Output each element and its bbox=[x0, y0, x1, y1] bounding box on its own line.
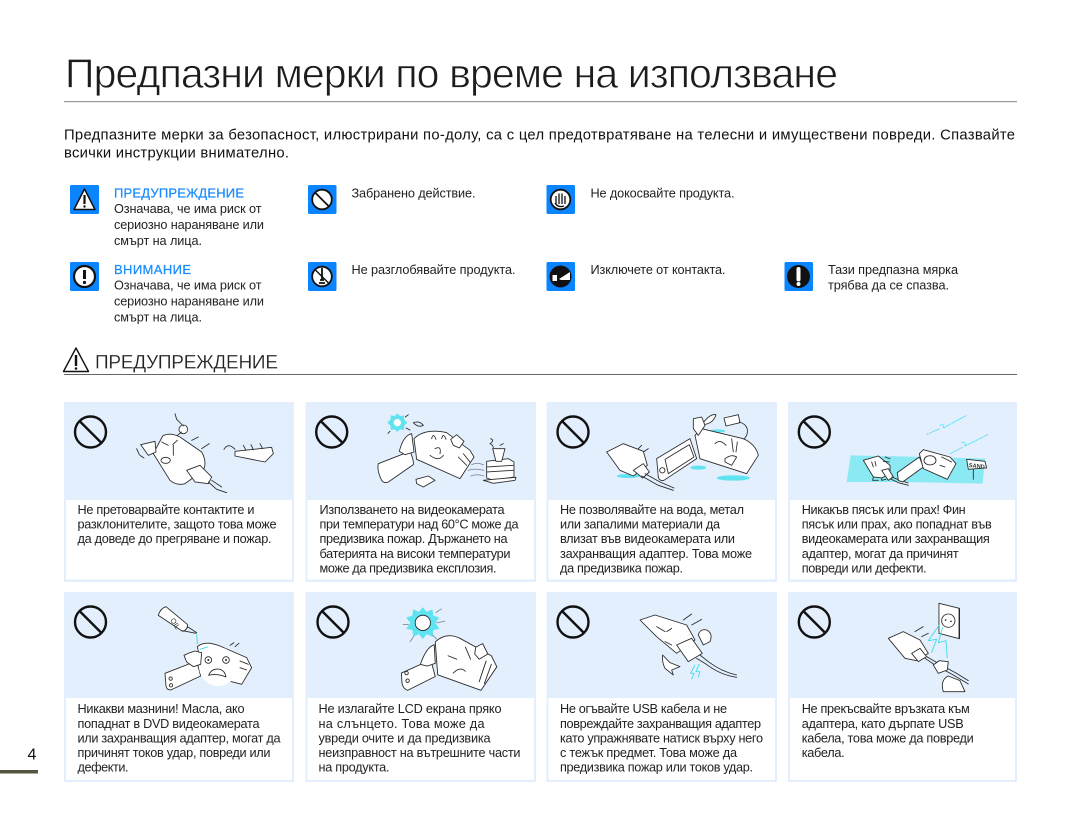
panel: do not bend cable: повреждайте захранващия адаптер bbox=[560, 717, 761, 731]
legend: warning: сериозно нараняване или bbox=[114, 218, 264, 232]
panel: high temperature: батерията на високи температури bbox=[320, 547, 510, 561]
legend: warning: смърт на лица. bbox=[114, 234, 202, 248]
panel: contacts overload: да доведе до прегряване и пожар. bbox=[78, 532, 272, 546]
icon: prohibited bbox=[558, 416, 588, 448]
panel: do not pull cable: Не прекъсвайте връзката към bbox=[802, 702, 970, 716]
intro text: всички инструкции внимателно. bbox=[64, 146, 289, 162]
panel: contacts overload: Не претоварвайте контактите и bbox=[78, 503, 254, 517]
icon: section warning triangle bbox=[64, 348, 88, 372]
panel: no oil: Никакви мазнини! Масла, ако bbox=[78, 702, 244, 716]
icon: prohibited bbox=[316, 416, 347, 448]
icon: unplug bbox=[546, 262, 575, 291]
panel: high temperature bbox=[306, 402, 536, 582]
icon: prohibited bbox=[799, 416, 830, 448]
legend: do not disassemble bbox=[308, 262, 516, 291]
illustration: camera on sand: SAND bbox=[968, 463, 985, 471]
legend: prohibited action: Забранено действие. bbox=[352, 186, 476, 200]
legend: caution: сериозно нараняване или bbox=[114, 294, 264, 308]
legend: caution: Означава, че има риск от bbox=[114, 278, 262, 292]
panel: do not bend cable bbox=[546, 592, 777, 782]
page number: 4 bbox=[28, 746, 36, 764]
legend: unplug bbox=[546, 262, 726, 291]
illustration: pulling cable from socket bbox=[888, 603, 968, 692]
legend: mandatory precaution: Тази предпазна мярка bbox=[828, 263, 959, 277]
page number bbox=[0, 746, 38, 774]
legend: warning bbox=[70, 185, 264, 248]
legend: caution bbox=[70, 262, 264, 324]
panel: water and metal: влизат във видеокамерата или bbox=[560, 532, 735, 546]
panel: no oil bbox=[64, 592, 294, 782]
icon: prohibited bbox=[318, 606, 348, 638]
panel: do not pull cable: адаптера, като дърпате USB bbox=[802, 717, 964, 731]
panel: do not pull cable: кабела. bbox=[802, 746, 845, 760]
illustration: overloaded adapter and power strip bbox=[137, 414, 273, 493]
illustration: sun on camera screen bbox=[401, 607, 497, 690]
icon: prohibited bbox=[75, 606, 106, 638]
illustration: wet adapter and camera bbox=[607, 415, 758, 490]
icon: warning triangle bbox=[70, 185, 99, 214]
legend: warning: Означава, че има риск от bbox=[114, 202, 262, 216]
panel: do not bend cable: Не огъвайте USB кабела и не bbox=[560, 702, 727, 716]
panel: do not pull cable: кабела, това може да повреди bbox=[802, 732, 974, 746]
section heading: warning: ПРЕДУПРЕЖДЕНИЕ bbox=[95, 352, 278, 373]
legend: do not touch bbox=[546, 185, 734, 214]
panel: no oil: причинят токов удар, повреди или bbox=[78, 746, 270, 760]
legend: mandatory precaution bbox=[784, 262, 959, 292]
icon: prohibited bbox=[75, 416, 106, 448]
panel: do not bend cable: като упражнявате натиск върху него bbox=[560, 732, 763, 746]
panel: sand and dust: пясък или прах, ако попаднат във bbox=[802, 518, 992, 532]
illustration: bent cable adapter bbox=[640, 614, 737, 679]
icon: prohibited bbox=[799, 606, 830, 638]
panel: no oil: попаднат в DVD видеокамерата bbox=[78, 717, 260, 731]
panel: contacts overload: разклонителите, защото това може bbox=[78, 518, 276, 532]
title: Предпазни мерки по време на използване bbox=[65, 50, 838, 96]
panel: high temperature: може да предизвика експлозия. bbox=[320, 562, 496, 576]
section heading: warning bbox=[64, 348, 1017, 375]
panel: sand and dust: повреди или дефекти. bbox=[802, 562, 927, 576]
panel: sand and dust bbox=[788, 402, 1017, 582]
intro text bbox=[64, 128, 1015, 162]
illustration: oil bottle and scared camera: OIL bbox=[168, 616, 182, 631]
panel: no direct sunlight: на слънцето. Това може да bbox=[318, 717, 485, 731]
intro text: Предпазните мерки за безопасност, илюстрирани по-долу, са с цел предотвратяване на телесни и имуществени повреди. Спазвайте bbox=[64, 128, 1015, 144]
illustration: hot camera near stove bbox=[378, 413, 516, 487]
legend: do not disassemble: Не разглобявайте продукта. bbox=[352, 263, 516, 277]
panel: high temperature: Използването на видеокамерата bbox=[320, 503, 505, 517]
panel: water and metal: да предизвика пожар. bbox=[560, 562, 683, 576]
panel: no oil: или захранващия адаптер, могат да bbox=[78, 732, 281, 746]
legend: do not touch: Не докосвайте продукта. bbox=[590, 186, 734, 200]
panel: water and metal: или запалими материали да bbox=[560, 518, 721, 532]
legend: warning: ПРЕДУПРЕЖДЕНИЕ bbox=[114, 186, 244, 200]
legend: prohibited action bbox=[308, 185, 476, 214]
icon: prohibited bbox=[558, 606, 588, 638]
icon: do not touch bbox=[546, 185, 575, 214]
panel: no direct sunlight: неизправност на вътрешните части bbox=[318, 746, 520, 760]
icon: do not disassemble bbox=[308, 262, 336, 291]
panel: high temperature: предизвика пожар. Държането на bbox=[320, 532, 508, 546]
icon: caution exclamation bbox=[70, 262, 99, 291]
panel: sand and dust: Никакъв пясък или прах! Фин bbox=[802, 503, 966, 517]
panel: no direct sunlight: на продукта. bbox=[318, 760, 390, 774]
panel: high temperature: при температури над 60°C може да bbox=[320, 518, 519, 532]
panel: no direct sunlight: Не излагайте LCD екрана пряко bbox=[318, 702, 502, 716]
panel: water and metal: Не позволявайте на вода, метал bbox=[560, 503, 744, 517]
panel: no direct sunlight bbox=[306, 592, 536, 782]
panel: contacts overload bbox=[64, 402, 294, 582]
panel: water and metal bbox=[546, 402, 777, 582]
panel: do not pull cable bbox=[788, 592, 1017, 782]
panel: water and metal: захранващия адаптер. Това може bbox=[560, 547, 752, 561]
illustration: camera on sand bbox=[847, 415, 988, 485]
panel: do not bend cable: с тежък предмет. Това може да bbox=[560, 746, 738, 760]
legend: unplug: Изключете от контакта. bbox=[590, 263, 726, 277]
icon: prohibited bbox=[308, 185, 336, 214]
panel: no direct sunlight: увреди очите и да предизвика bbox=[318, 732, 491, 746]
panel: sand and dust: видеокамерата или захранващия bbox=[802, 532, 990, 546]
icon: mandatory exclamation bbox=[784, 262, 813, 291]
panel: sand and dust: адаптер, могат да причинят bbox=[802, 547, 959, 561]
panel: no oil: дефекти. bbox=[78, 760, 128, 774]
panel: do not bend cable: предизвика пожар или токов удар. bbox=[560, 760, 753, 774]
illustration: oil bottle and scared camera bbox=[158, 607, 252, 690]
legend: mandatory precaution: трябва да се спазва. bbox=[828, 278, 949, 292]
legend: caution: ВНИМАНИЕ bbox=[114, 262, 191, 277]
legend: caution: смърт на лица. bbox=[114, 310, 202, 324]
